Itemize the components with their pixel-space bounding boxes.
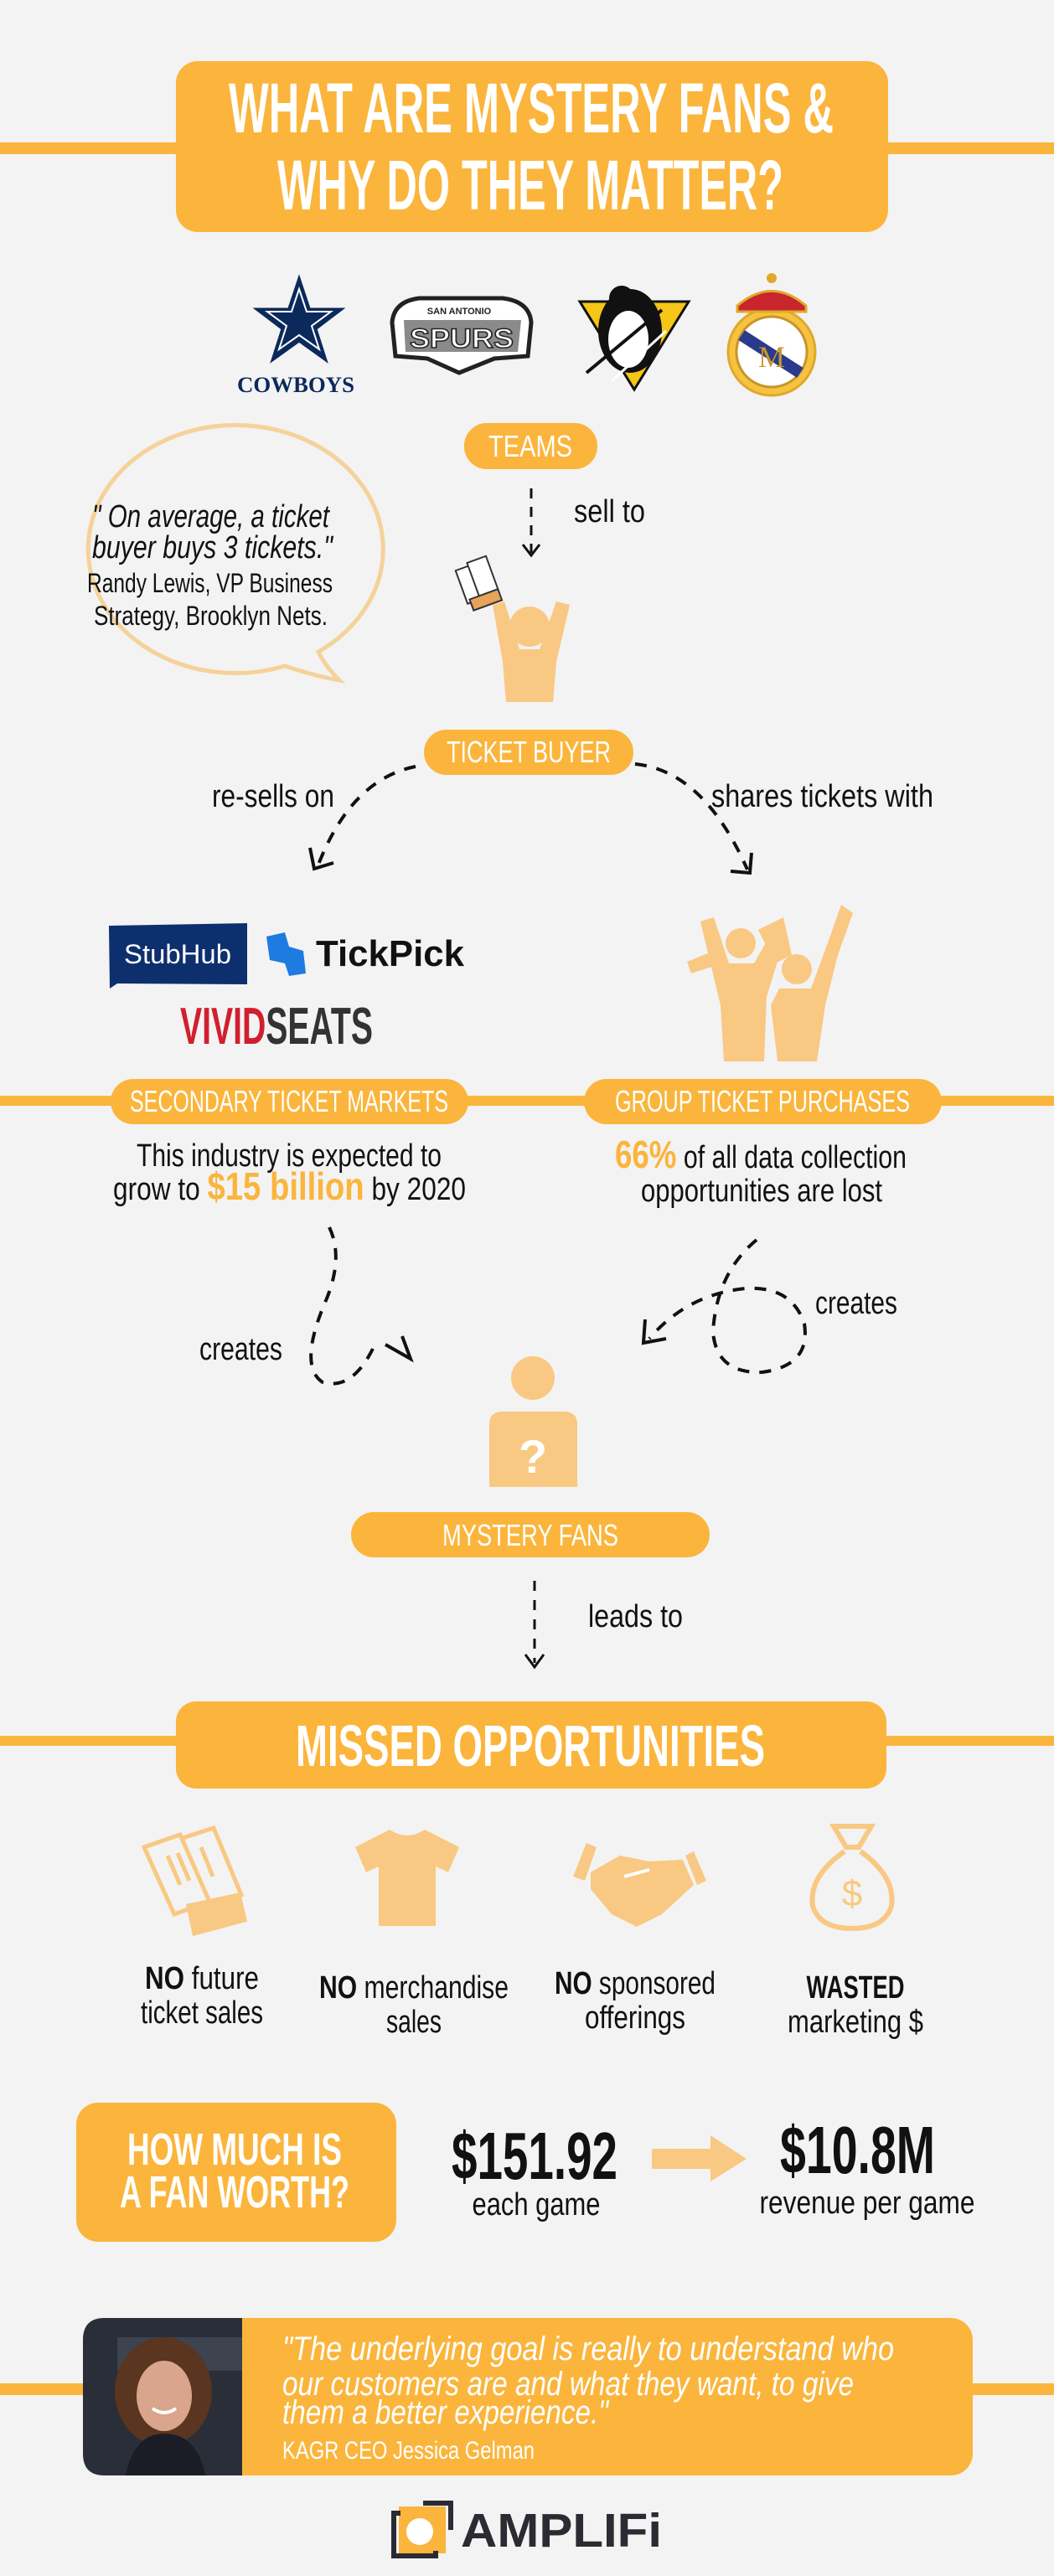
callout: ceo quote: our customers are and what they want, to give [282,2366,854,2403]
callout: quote bubble: Strategy, Brooklyn Nets. [94,601,328,631]
icon: handshake [573,1843,706,1927]
item: wasted marketing: WASTED [806,1970,905,2006]
label: shares tickets with: shares tickets with [711,779,933,814]
icon: mystery fan: ? [519,1430,547,1483]
pill: teams: TEAMS [488,429,572,463]
logo: penguins [580,286,689,390]
text: industry growth: grow to $15 billion by 2020 [113,1164,466,1208]
item: wasted marketing: marketing $ [788,2005,923,2040]
label: sell to: sell to [574,494,645,529]
logo: stubhub: StubHub [124,939,231,969]
stat: per fan per game: $151.92 [452,2119,617,2193]
logo: real madrid [728,273,815,395]
item: no merchandise sales: sales [386,2005,442,2040]
callout: quote bubble [87,425,383,680]
stat: per fan per game [452,2119,617,2222]
pill: group ticket purchases: GROUP TICKET PURCHASES [615,1084,910,1118]
arrow: re-sells [310,767,416,869]
arrow: orange [652,2135,747,2181]
logo: spurs: SPURS [410,323,514,354]
label: leads to: leads to [588,1599,683,1634]
heading: missed opportunities [176,1701,886,1789]
pill: teams [464,423,597,469]
logo: amplifi: AMPLIFi [461,2504,662,2558]
logos: secondary markets [109,923,465,1056]
callout: how much is a fan worth: A FAN WORTH? [120,2167,349,2217]
callout: quote bubble: " On average, a ticket [92,499,330,534]
item: wasted marketing: $ [842,1873,862,1914]
item: no sponsored offerings: offerings [585,2000,685,2036]
stat: revenue per game: $10.8M [780,2113,935,2187]
item: no merchandise sales [319,1830,509,2040]
title [176,61,888,232]
stat: revenue per game [759,2113,975,2221]
logo: vividseats: VIVIDSEATS [180,998,373,1056]
pill: group ticket purchases [584,1079,942,1124]
callout: ceo quote [83,2318,973,2475]
stat: per fan per game: each game [473,2187,600,2222]
arrow: leads to [525,1581,544,1667]
photo: jessica gelman [83,2318,242,2475]
icon: ticket buyer person with tickets [454,556,570,702]
pill: mystery fans [351,1512,710,1557]
icon: tickets [144,1828,245,1933]
label: re-sells on: re-sells on [212,779,334,814]
text: 66% lost [615,1133,907,1209]
callout: quote bubble: buyer buys 3 tickets." [92,530,333,565]
item: no future ticket sales: NO future [145,1961,259,1996]
icon: shirt [355,1830,459,1926]
heading: missed opportunities: MISSED OPPORTUNITIES [296,1713,765,1778]
callout: how much is a fan worth: HOW MUCH IS [127,2124,342,2175]
item: no merchandise sales: NO merchandise [319,1970,509,2006]
pill: mystery fans: MYSTERY FANS [442,1518,618,1552]
pill: ticket buyer [424,730,633,775]
callout: ceo quote: them a better experience." [282,2394,609,2431]
logo: cowboys: COWBOYS [237,373,354,397]
logo: stubhub [109,923,247,989]
logo: cowboys [237,278,354,397]
callout: how much is a fan worth [76,2103,396,2242]
team logos [237,273,815,397]
text: 66% lost: 66% of all data collection [615,1133,907,1176]
callout: ceo quote: "The underlying goal is really to understand who [282,2331,894,2367]
logo: spurs: SAN ANTONIO [427,307,492,317]
stat: revenue per game: revenue per game [759,2186,975,2221]
text: industry growth [113,1138,466,1208]
item: no sponsored offerings [555,1843,716,2036]
arrow: creates left [311,1227,411,1384]
text: 66% lost: opportunities are lost [641,1174,882,1209]
item: no sponsored offerings: NO sponsored [555,1966,716,2001]
icon: money bag [812,1826,892,1928]
pill: secondary ticket markets: SECONDARY TICKET MARKETS [130,1084,448,1118]
arrow: shares [635,764,752,873]
item: no future ticket sales: ticket sales [141,1995,263,2031]
logo: real madrid: M [758,340,785,374]
callout: ceo quote: KAGR CEO Jessica Gelman [282,2437,535,2465]
callout: quote bubble: Randy Lewis, VP Business [87,568,333,598]
pill: secondary ticket markets [111,1079,468,1124]
item: wasted marketing [788,1826,923,2040]
logo: tickpick: TickPick [316,933,465,974]
arrow: creates right [643,1240,805,1372]
logo: spurs [392,298,531,373]
label: creates left: creates [199,1332,282,1367]
item: no future ticket sales [141,1828,263,2031]
icon: mystery fan [489,1356,577,1487]
arrow: teams to ticket buyer [523,488,540,555]
text: industry growth: This industry is expected to [137,1138,442,1174]
pill: ticket buyer: TICKET BUYER [447,735,611,769]
label: creates right: creates [815,1286,897,1321]
icon: group of fans [687,905,853,1061]
